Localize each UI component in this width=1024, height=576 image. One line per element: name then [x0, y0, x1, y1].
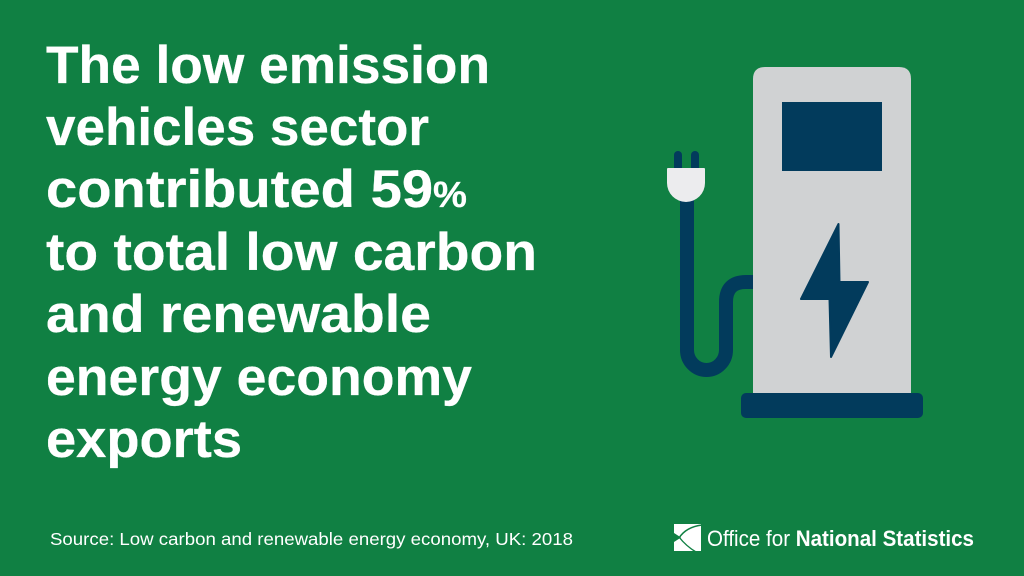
title: to total low carbon — [46, 223, 537, 282]
title: exports — [46, 410, 242, 469]
title: and renewable — [46, 285, 431, 344]
icon: electric vehicle charging station — [667, 67, 923, 418]
title: energy economy — [46, 348, 473, 407]
icon: charging cable — [687, 195, 753, 370]
title: The low emission — [46, 36, 490, 95]
icon: plug — [667, 151, 705, 202]
source note: Source: Low carbon and renewable energy economy, UK: 2018 — [50, 529, 573, 549]
icon: ONS logo mark — [674, 524, 702, 552]
ONS logo — [674, 524, 974, 552]
charger base — [741, 393, 923, 418]
charger body — [753, 67, 911, 394]
charger screen — [782, 102, 882, 171]
logo wordmark: Office for National Statistics — [707, 526, 974, 551]
title: contributed 59 % — [46, 160, 467, 219]
title — [46, 36, 537, 469]
title: vehicles sector — [46, 98, 429, 157]
icon: lightning bolt — [801, 224, 868, 357]
